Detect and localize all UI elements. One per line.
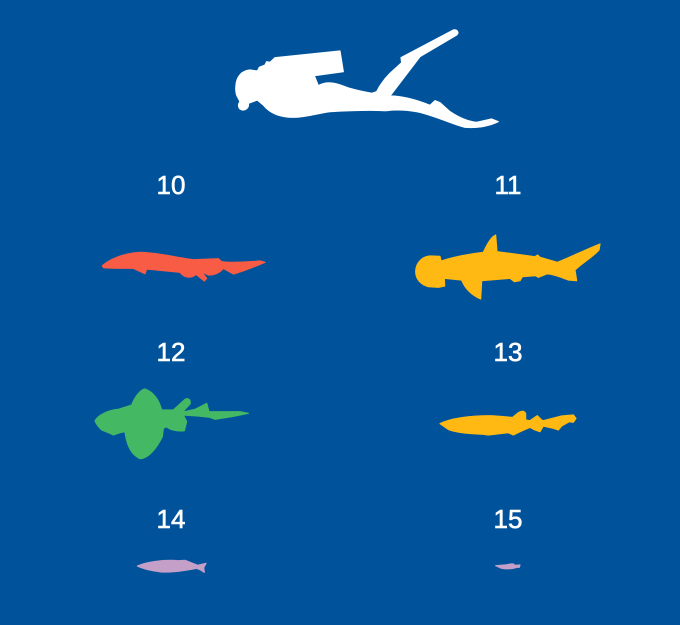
label: 14: 14: [157, 504, 185, 534]
icon: diver silhouette: [236, 30, 498, 128]
label: 15: 15: [494, 504, 522, 534]
label: 12: 12: [157, 337, 185, 367]
label: 13: 13: [494, 337, 522, 367]
icon: lilac tiny shark silhouette: [496, 564, 520, 569]
icon: lilac small shark silhouette: [137, 560, 206, 572]
label: 10: 10: [157, 170, 185, 200]
label: 11: 11: [494, 170, 522, 200]
icon: green angel shark silhouette: [95, 389, 248, 459]
icon: yellow hammerhead silhouette: [416, 235, 600, 299]
icon: red eel-like shark silhouette: [102, 252, 265, 281]
icon: yellow catshark silhouette: [440, 411, 576, 435]
